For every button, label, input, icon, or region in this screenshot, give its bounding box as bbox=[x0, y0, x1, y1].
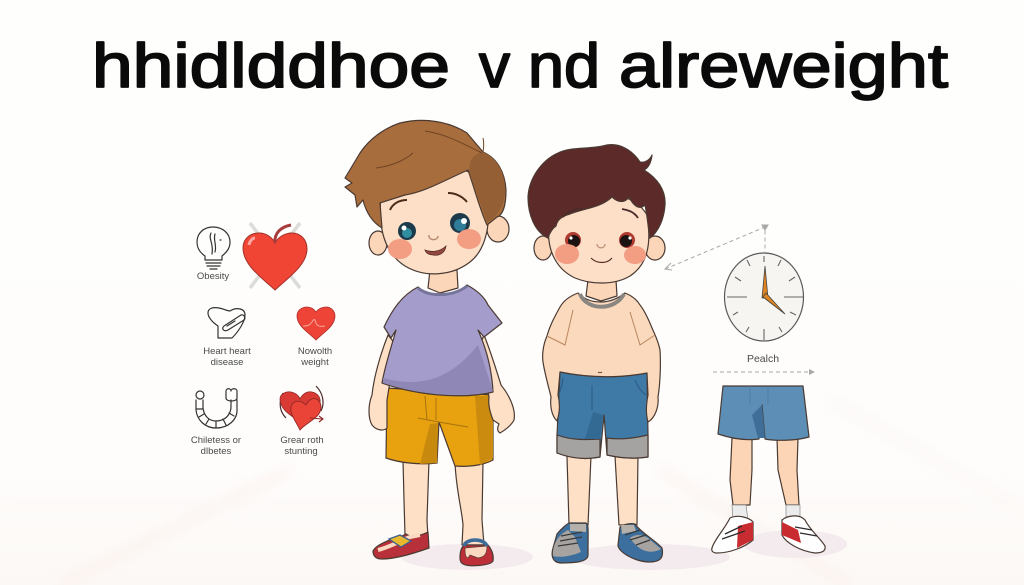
left sneaker bbox=[552, 523, 588, 563]
left sandal bbox=[373, 532, 429, 559]
right sneaker bbox=[782, 516, 825, 553]
socks bbox=[732, 505, 800, 520]
right sandal bbox=[460, 540, 493, 566]
icon: U-shaped tube bbox=[196, 389, 237, 428]
icon: clock bbox=[724, 253, 804, 341]
title bbox=[92, 32, 948, 101]
title: alreweight bbox=[619, 32, 948, 101]
icon: heart with pulse bbox=[297, 307, 335, 340]
neck bbox=[586, 280, 617, 301]
icon: crossed-out heart bbox=[243, 223, 307, 290]
label: heart disease: Heart heart bbox=[203, 346, 251, 357]
ears bbox=[369, 216, 509, 255]
panel: clock and partial figure bbox=[665, 225, 847, 558]
label: weight: weight bbox=[300, 357, 329, 368]
cheeks bbox=[555, 244, 646, 264]
dashed arrow bbox=[713, 369, 815, 375]
brows, nose, mouth bbox=[563, 209, 638, 262]
panel: health risk icons bbox=[191, 223, 335, 457]
icon: light bulb bbox=[197, 227, 230, 269]
label: diabetes: dlbetes bbox=[201, 446, 232, 457]
eyes bbox=[398, 213, 470, 240]
bare torso and arms bbox=[543, 293, 660, 422]
title: nd bbox=[528, 32, 600, 101]
sleeve lines bbox=[547, 310, 655, 345]
panel: overweight boy bbox=[345, 120, 533, 570]
dashed arrow to clock bbox=[665, 225, 768, 270]
label: diabetes: Chiletess or bbox=[191, 435, 241, 446]
legs bbox=[730, 438, 799, 505]
hair bbox=[345, 120, 506, 228]
navel bbox=[598, 371, 602, 374]
yellow shorts bbox=[386, 388, 493, 466]
purple t-shirt bbox=[382, 285, 502, 396]
ground shadow bbox=[401, 544, 533, 570]
ears bbox=[534, 236, 665, 260]
icon: overlapping hearts with arrow bbox=[280, 386, 323, 430]
label: growth stunting: Grear roth bbox=[280, 435, 324, 446]
panel: normal-weight boy bbox=[528, 145, 730, 570]
title: v bbox=[479, 32, 510, 101]
title: hhidlddhoe bbox=[92, 32, 450, 101]
ground shadow bbox=[743, 530, 847, 558]
left sneaker bbox=[712, 516, 753, 553]
label: weight: Nowolth bbox=[298, 346, 332, 357]
ground shadow bbox=[570, 544, 730, 570]
arms bbox=[369, 335, 514, 433]
legs bbox=[567, 456, 638, 525]
eyes bbox=[565, 232, 635, 248]
blue denim shorts bbox=[557, 372, 648, 458]
face bbox=[549, 194, 649, 283]
label: growth stunting: stunting bbox=[284, 446, 318, 457]
right sneaker bbox=[618, 524, 662, 562]
label: obesity: Obesity bbox=[197, 271, 229, 282]
blue shorts bbox=[718, 386, 809, 440]
grey collar bbox=[580, 294, 624, 307]
label: heart disease: disease bbox=[211, 357, 243, 368]
legs bbox=[398, 460, 484, 545]
cheeks bbox=[388, 229, 481, 259]
brows, nose, mouth bbox=[390, 193, 467, 255]
neck bbox=[428, 270, 458, 293]
face bbox=[380, 167, 489, 274]
dark hair bbox=[528, 145, 665, 238]
icon: heart outline with pill bbox=[208, 308, 245, 338]
label: peach: Pealch bbox=[747, 353, 779, 365]
